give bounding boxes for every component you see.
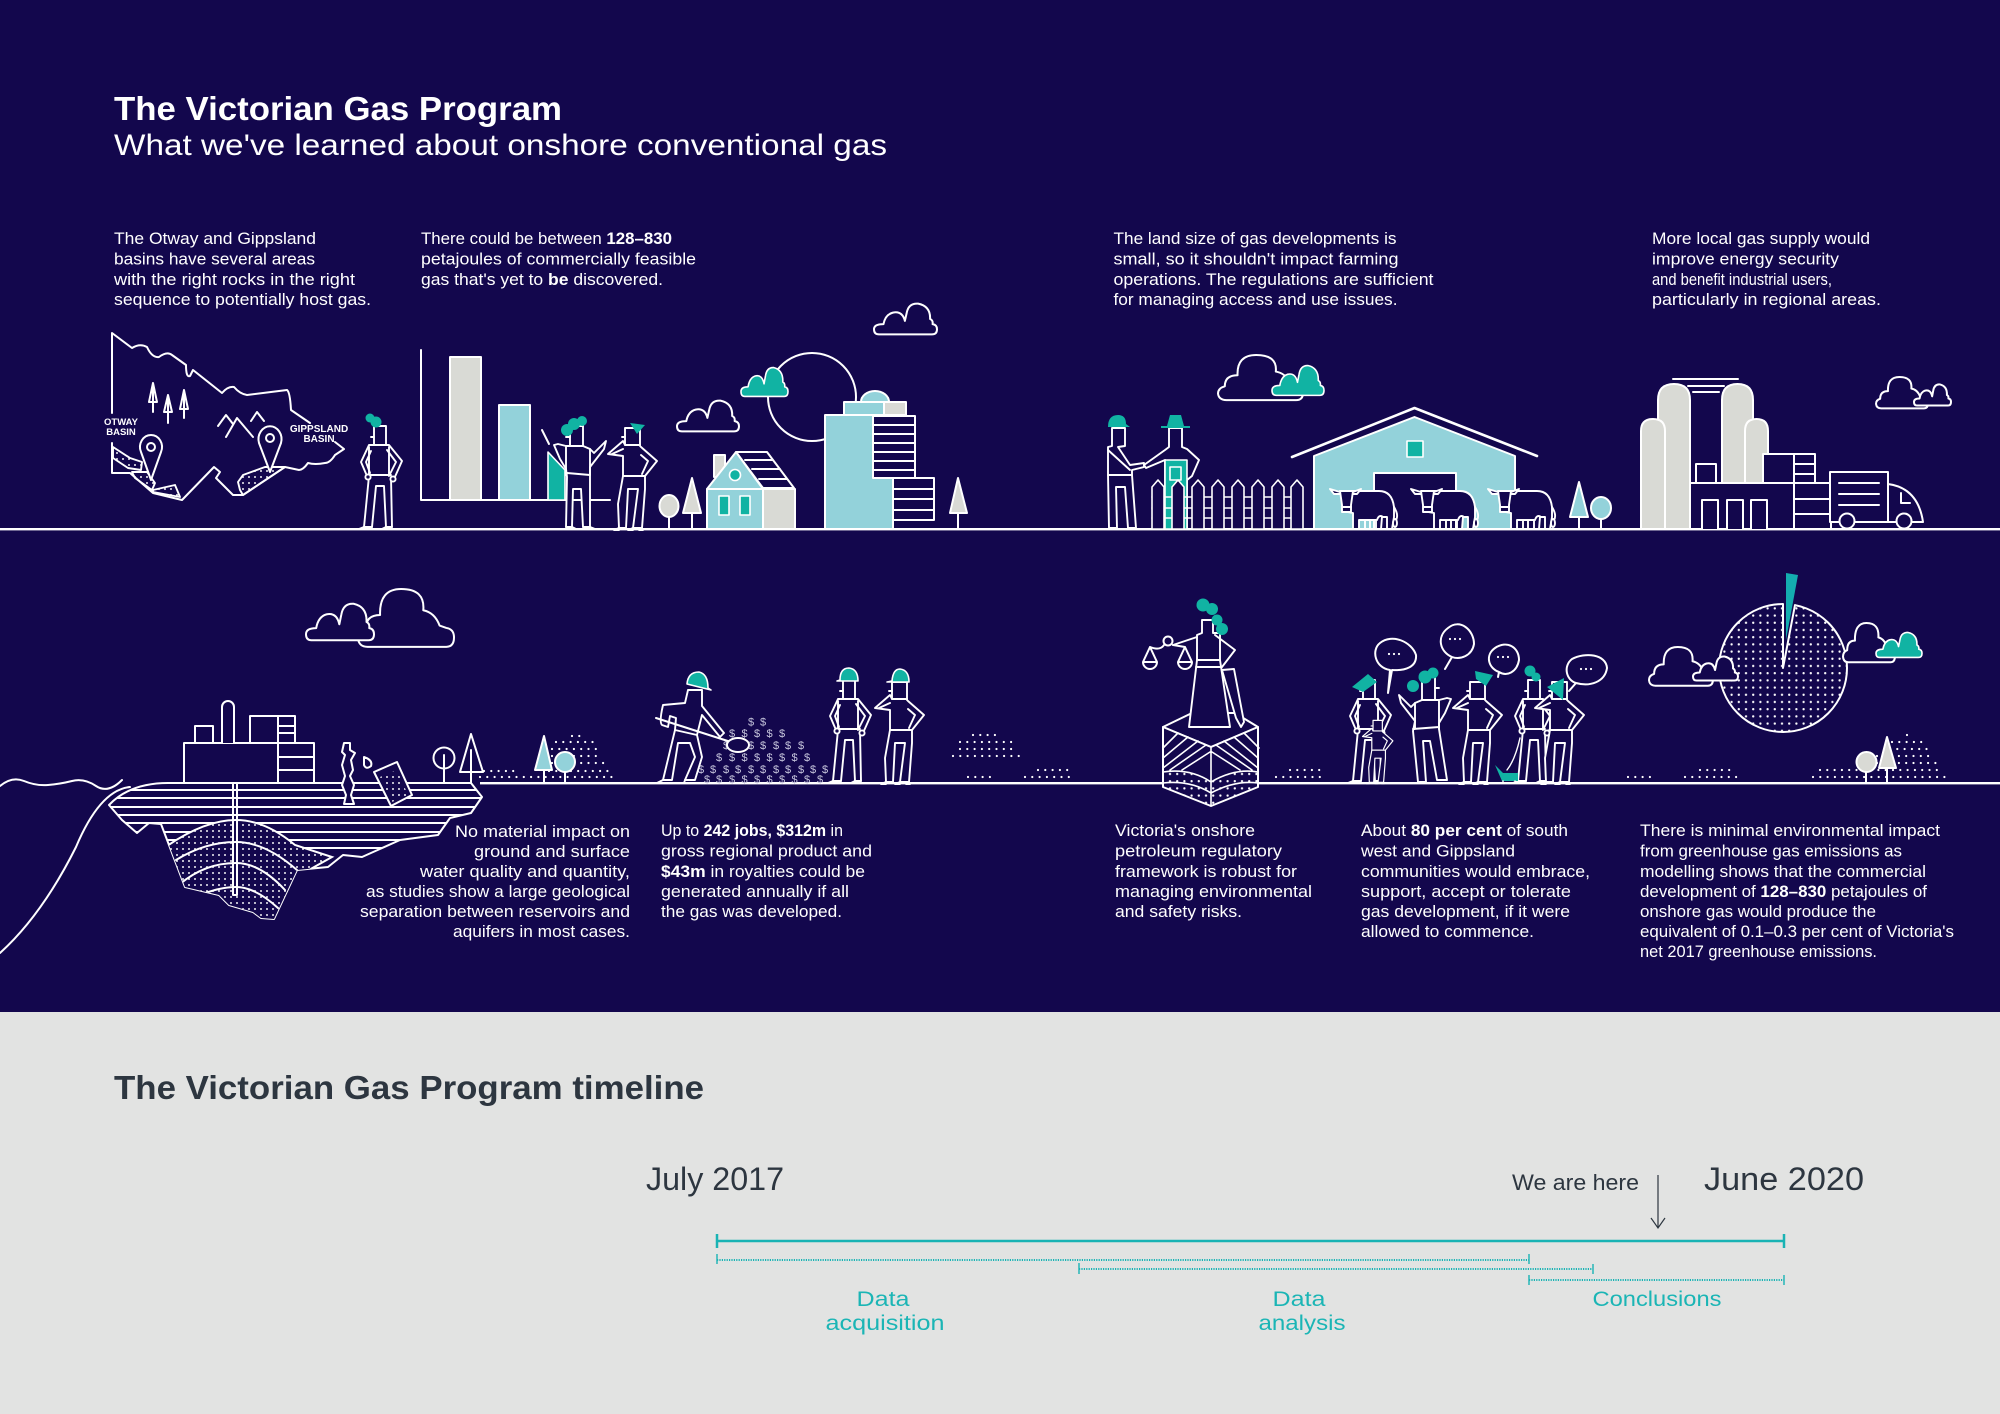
clouds around pie chart bbox=[1649, 623, 1922, 686]
dotted phase lines bbox=[717, 1260, 1784, 1280]
text: water impact: No material impact on bbox=[455, 823, 630, 841]
dotted mound between statue and crowd bbox=[1276, 770, 1327, 777]
text: water impact: as studies show a large geological bbox=[366, 883, 630, 901]
dotted mounds centre bbox=[953, 735, 1075, 777]
timeline main bar bbox=[717, 1234, 1784, 1248]
text: community attitudes: west and Gippsland bbox=[1360, 842, 1515, 860]
text: jobs: generated annually if all bbox=[661, 883, 849, 901]
pile of dollar signs: $$$$$$$$ bbox=[716, 752, 810, 764]
text: jobs: gross regional product and bbox=[661, 842, 872, 860]
text: regulatory framework: framework is robust for bbox=[1115, 863, 1298, 881]
timeline heading: The Victorian Gas Program timeline bbox=[114, 1069, 704, 1106]
timeline end date: June 2020 bbox=[1704, 1161, 1864, 1197]
text: greenhouse emissions: modelling shows that the commercial bbox=[1640, 863, 1926, 881]
house bbox=[707, 452, 795, 529]
fence bbox=[1152, 480, 1303, 529]
text: jobs: $43m in royalties could be bbox=[661, 863, 865, 881]
tree right of building bbox=[950, 478, 967, 529]
text: regulatory framework: and safety risks. bbox=[1115, 903, 1242, 921]
text: water impact bbox=[360, 823, 630, 941]
pie chart of emissions bbox=[1719, 573, 1847, 732]
text: energy security: particularly in regional areas. bbox=[1652, 291, 1881, 309]
text: community attitudes: allowed to commence. bbox=[1361, 923, 1534, 941]
map pins bbox=[140, 426, 282, 480]
text: energy security: and benefit industrial users, bbox=[1652, 271, 1832, 289]
data acquisition bar bbox=[717, 1254, 1529, 1264]
dotted mound with trees lower right bbox=[1628, 735, 1950, 783]
text: land size: for managing access and use issues. bbox=[1114, 291, 1398, 309]
text: water impact: aquifers in most cases. bbox=[453, 923, 630, 941]
geological cross-section bbox=[100, 783, 490, 925]
text: community attitudes bbox=[1360, 822, 1590, 941]
text: basins: sequence to potentially host gas. bbox=[114, 291, 371, 309]
label: acquisition: acquisition bbox=[826, 1312, 944, 1335]
pile of dollar signs bbox=[698, 716, 828, 786]
subtitle: What we've learned about onshore conventional gas bbox=[114, 129, 887, 162]
sun and clouds bbox=[677, 304, 937, 441]
label: analysis: analysis bbox=[1258, 1312, 1346, 1335]
crowd of people bbox=[1348, 666, 1584, 784]
arrow: we are here bbox=[1651, 1175, 1665, 1228]
surface plant on cross-section bbox=[184, 701, 314, 783]
trees right of barn bbox=[1570, 482, 1611, 529]
text: petajoules: petajoules of commercially feasible bbox=[421, 250, 696, 268]
text: jobs: the gas was developed. bbox=[661, 903, 842, 921]
text: greenhouse emissions: development of 128–830 petajoules of bbox=[1640, 883, 1927, 901]
text: land size: The land size of gas developments is bbox=[1114, 230, 1396, 248]
conclusions bar bbox=[1529, 1275, 1784, 1285]
text: petajoules bbox=[421, 230, 696, 289]
speech bubbles bbox=[1375, 624, 1607, 693]
text: regulatory framework: managing environmental bbox=[1115, 883, 1312, 901]
cows bbox=[1330, 489, 1555, 529]
text: basins: The Otway and Gippsland bbox=[114, 230, 316, 248]
label: Otway Basin: BASIN bbox=[106, 427, 136, 438]
cloud upper right bbox=[1876, 377, 1951, 408]
text: community attitudes: communities would embrace, bbox=[1361, 863, 1590, 881]
dog on leash bbox=[1495, 738, 1520, 783]
text: water impact: separation between reservoirs and bbox=[360, 903, 630, 921]
text: basins: basins have several areas bbox=[114, 250, 315, 268]
barn bbox=[1292, 408, 1537, 529]
text: greenhouse emissions: onshore gas would produce the bbox=[1640, 903, 1876, 921]
upper ground line bbox=[0, 528, 2000, 530]
text: energy security bbox=[1652, 230, 1881, 309]
pile of dollar signs: $$$$$$$$$$$ bbox=[698, 764, 828, 776]
trees near house bbox=[660, 478, 701, 529]
timeline start date: July 2017 bbox=[646, 1161, 784, 1197]
navy background panel bbox=[0, 0, 2000, 1012]
text: regulatory framework: Victoria's onshore bbox=[1115, 822, 1255, 840]
map of Victoria with basins bbox=[104, 333, 348, 500]
text: water impact: ground and surface bbox=[474, 843, 630, 861]
water waves and coastline bbox=[0, 779, 130, 953]
pile of dollar signs: $$ bbox=[748, 716, 766, 728]
text: community attitudes: About 80 per cent of south bbox=[1361, 822, 1568, 840]
label: data acquisition: Data bbox=[856, 1288, 910, 1311]
text: petajoules: There could be between 128–830 bbox=[421, 230, 672, 248]
truck bbox=[1830, 472, 1923, 528]
dotted mound with trees bbox=[480, 736, 617, 783]
text: basins: with the right rocks in the right bbox=[113, 271, 355, 289]
office building bbox=[825, 391, 934, 529]
text: energy security: More local gas supply would bbox=[1652, 230, 1870, 248]
data analysis bar bbox=[1079, 1263, 1593, 1274]
text: water impact: water quality and quantity, bbox=[419, 863, 630, 881]
core sample, water drop and beaker bbox=[342, 743, 412, 806]
grey timeline background panel bbox=[0, 1012, 2000, 1414]
text: land size bbox=[1114, 230, 1434, 309]
label: Gippsland Basin: BASIN bbox=[303, 434, 335, 445]
workers standing bbox=[828, 668, 924, 784]
basin areas bbox=[113, 447, 285, 497]
worker shovelling bbox=[656, 672, 749, 783]
pile of dollar signs: $$$$$$ bbox=[723, 740, 804, 752]
text: land size: small, so it shouldn't impact farming bbox=[1114, 250, 1398, 268]
person with teal hair beside map bbox=[359, 414, 402, 529]
title: The Victorian Gas Program bbox=[114, 90, 562, 127]
text: greenhouse emissions: There is minimal environmental impact bbox=[1640, 822, 1940, 840]
text: petajoules: gas that's yet to be discovered. bbox=[421, 271, 663, 289]
label: Otway Basin: OTWAY bbox=[104, 417, 138, 428]
map trees and mountains bbox=[149, 383, 264, 437]
lower ground line bbox=[480, 782, 2000, 784]
we are here label: We are here bbox=[1512, 1170, 1639, 1195]
text: regulatory framework: petroleum regulatory bbox=[1115, 842, 1283, 860]
text: land size: operations. The regulations are sufficient bbox=[1114, 271, 1434, 289]
pile of dollar signs: $$$$$ bbox=[729, 728, 785, 740]
text: regulatory framework bbox=[1115, 822, 1312, 921]
lady justice statue on block bbox=[1143, 598, 1259, 806]
text: community attitudes: support, accept or tolerate bbox=[1361, 883, 1571, 901]
text: jobs bbox=[661, 822, 872, 921]
label: data analysis: Data bbox=[1272, 1288, 1326, 1311]
text: greenhouse emissions: net 2017 greenhouse emissions. bbox=[1640, 943, 1877, 961]
presenter with pointer bbox=[542, 416, 606, 529]
label: conclusions: Conclusions bbox=[1592, 1288, 1722, 1311]
text: jobs: Up to 242 jobs, $312m in bbox=[661, 822, 843, 840]
gas plant bbox=[1641, 379, 1831, 529]
text: basins bbox=[113, 230, 371, 309]
text: greenhouse emissions: equivalent of 0.1–0.3 per cent of Victoria's bbox=[1640, 923, 1954, 941]
text: greenhouse emissions bbox=[1640, 822, 1954, 961]
text: energy security: improve energy security bbox=[1652, 250, 1840, 268]
label: Gippsland Basin: GIPPSLAND bbox=[290, 424, 348, 435]
large cloud lower left bbox=[306, 589, 454, 647]
workers shaking hands bbox=[1108, 415, 1199, 529]
bar chart bbox=[421, 350, 610, 500]
person with teal hat bbox=[608, 423, 657, 530]
text: community attitudes: gas development, if it were bbox=[1361, 903, 1570, 921]
cloud pair above barn bbox=[1218, 355, 1324, 400]
trees on cross-section bbox=[434, 734, 483, 783]
text: greenhouse emissions: from greenhouse gas emissions as bbox=[1640, 842, 1902, 860]
pile of dollar signs: $$$$$$$$$$ bbox=[704, 774, 823, 786]
